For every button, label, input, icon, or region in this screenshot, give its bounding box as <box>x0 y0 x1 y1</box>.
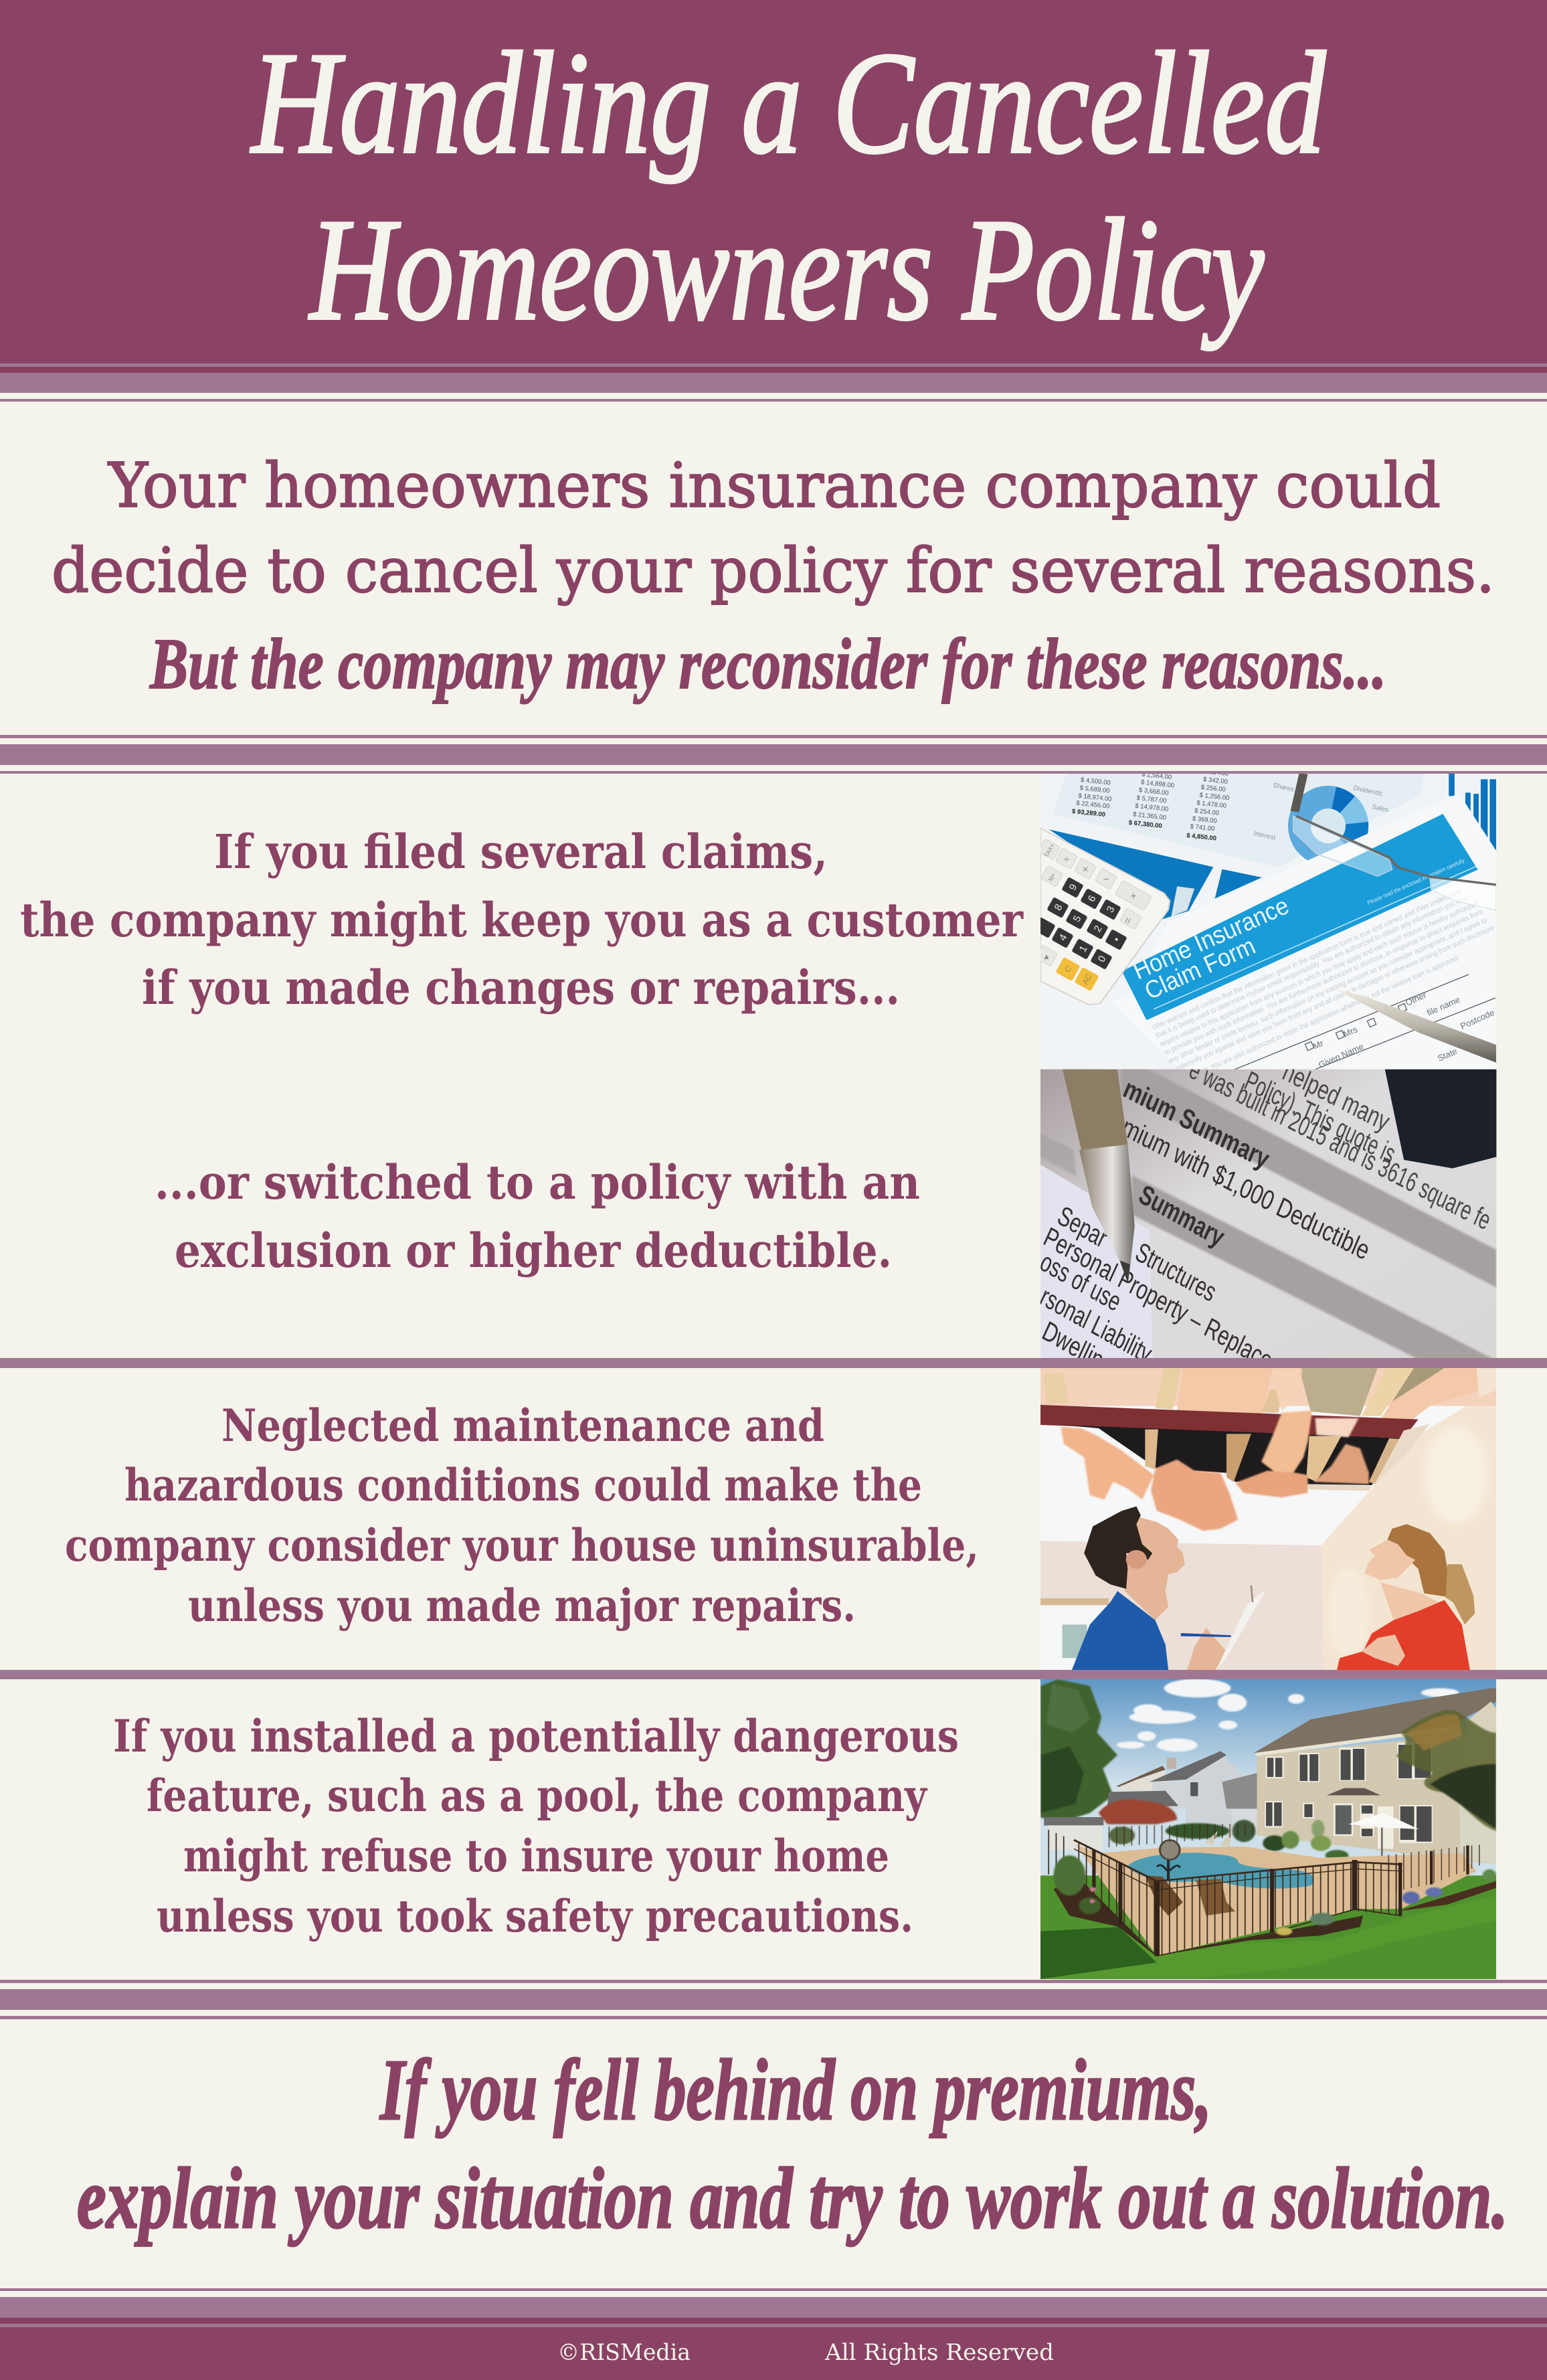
calculator keys: M+ <box>1047 872 1057 883</box>
calculator keys: 9 <box>1067 882 1080 893</box>
text: dangerous feature: unless you took safety precautions. <box>157 1890 913 1942</box>
room walls <box>1040 1388 1496 1670</box>
claim form lettering: Home Insurance <box>1129 891 1293 985</box>
calculator keys: × <box>1082 864 1089 875</box>
calculator keys: + <box>1130 891 1137 902</box>
document small text: $ 67,380.00 <box>1128 819 1162 830</box>
document small text: $ 256.00 <box>1200 784 1226 794</box>
text: several claims: if you made changes or repairs... <box>142 960 900 1015</box>
text: neglected maintenance: company consider your house uninsurable, <box>65 1519 979 1571</box>
calculator keys: AC <box>1080 972 1094 987</box>
pool deck <box>1075 1845 1476 1956</box>
right tree <box>1396 1710 1496 1831</box>
main house <box>1254 1688 1496 1865</box>
footer credits: ©RISMedia <box>557 2339 691 2366</box>
calculator keys: 2 <box>1092 924 1105 934</box>
umbrella <box>1348 1812 1419 1857</box>
table and chart document <box>1052 774 1424 867</box>
document text: Structures <box>1131 1237 1221 1308</box>
photo: policy premium summary <box>1036 1054 1496 1399</box>
calculator keys: 5 <box>1071 914 1084 924</box>
calculator keys: 1 <box>1077 944 1090 954</box>
dark object <box>1385 1070 1496 1169</box>
woman inspecting <box>1337 1524 1475 1670</box>
claim form lettering: file name <box>1425 995 1461 1018</box>
claim form sheet <box>1123 795 1496 1020</box>
red shrub <box>1099 1800 1177 1824</box>
document small text: $ 4,850.00 <box>1186 832 1216 843</box>
document text: rsonal Liability <box>1036 1281 1157 1369</box>
divider band <box>0 1980 1547 2019</box>
claim form lettering: Claim Form <box>1141 932 1259 1005</box>
title: Homeowners Policy <box>308 189 1264 351</box>
neighbouring houses <box>1044 1751 1257 1850</box>
text: higher deductible: ...or switched to a policy with an <box>155 1155 920 1210</box>
document small text: Shares <box>1272 782 1295 794</box>
document text: Separ <box>1053 1200 1112 1254</box>
document small text: Dividends <box>1352 784 1383 798</box>
calculator keys: • <box>1111 935 1123 944</box>
calculator keys: ÷ <box>1064 854 1070 865</box>
claim form lettering: Mr <box>1311 1038 1326 1051</box>
photo: backyard pool with fence <box>1040 1679 1496 1979</box>
title: Handling a Cancelled <box>250 23 1326 184</box>
claim form lettering: State <box>1436 1046 1459 1064</box>
closing message <box>77 2042 1508 2247</box>
calculator keys: − <box>1103 874 1109 885</box>
pie chart <box>1288 786 1368 866</box>
left tree <box>1040 1679 1117 1822</box>
calculator keys: = <box>1121 916 1135 926</box>
claim form lettering: that it is being used to determine my/our credit responsibility. You are authorized to obtain any information you may <box>1154 894 1470 1040</box>
document text: oss of use <box>1036 1246 1125 1317</box>
text: dangerous feature: If you installed a potentially dangerous <box>113 1710 959 1762</box>
closing message: If you fell behind on premiums, <box>379 2042 1212 2138</box>
document small text: $ 5,787.00 <box>1136 794 1167 805</box>
footer banner <box>0 2288 1547 2380</box>
pen <box>1337 990 1496 1063</box>
text: higher deductible: exclusion or higher deductible. <box>175 1223 892 1278</box>
glasses <box>1293 774 1496 910</box>
intro text: decide to cancel your policy for several reasons. <box>52 535 1495 606</box>
divider bar <box>0 1670 1547 1679</box>
claim form lettering: Postcode <box>1459 1007 1496 1031</box>
document small text: $ 1,478.00 <box>1196 799 1227 810</box>
flowers and shrubs <box>1054 1855 1496 1936</box>
footer credits: All Rights Reserved <box>824 2339 1054 2366</box>
claim form lettering: Other <box>1404 990 1429 1008</box>
document small text: $ 93,289.00 <box>1072 808 1105 819</box>
claim form lettering: require relative to this application from any sources to which you may apply and each such source is hereby authorized <box>1158 900 1479 1049</box>
lawn and mulch <box>1040 1875 1496 1979</box>
calculator keys: TAX+ <box>1043 842 1056 859</box>
document small text: $ 5,689.00 <box>1079 784 1110 795</box>
text: dangerous feature <box>113 1710 959 1942</box>
document text: mium Summary <box>1119 1073 1274 1175</box>
document text: Summary <box>1135 1179 1229 1253</box>
document small text: $ 254.00 <box>1194 807 1219 817</box>
document small text: $ 18,974.00 <box>1078 792 1112 803</box>
intro text: Your homeowners insurance company could <box>107 450 1441 521</box>
calculator keys: 3 <box>1105 904 1117 915</box>
top-right bar chart <box>1449 774 1496 851</box>
claim form lettering: indemnify you against and save you harm from any and all claims in damages or otherwise arising from such disclosure <box>1174 924 1495 1073</box>
document text: helped many <box>1279 1055 1394 1138</box>
calculator keys: C <box>1063 964 1074 974</box>
document small text <box>1072 774 1388 841</box>
claim form lettering: Given Name <box>1317 1041 1365 1070</box>
claim form lettering: Mrs <box>1342 1024 1359 1039</box>
text: several claims: If you filed several claims, <box>214 824 828 879</box>
pen <box>1063 1070 1135 1283</box>
document small text: Interest <box>1253 830 1276 842</box>
man inspecting <box>1072 1507 1266 1670</box>
calculator keys: 0 <box>1096 954 1109 964</box>
document small text: $ 2,564.00 <box>1142 771 1172 781</box>
title <box>250 23 1326 351</box>
clouds <box>1117 1679 1459 1752</box>
document text: Policy). This quote is <box>1241 1066 1400 1170</box>
photo: home insurance claim form <box>1040 774 1496 1070</box>
intro text <box>52 450 1495 606</box>
claim form lettering: to provide you with such information. You are furthermore authorized to disclose, in response to direct enquiries from <box>1163 908 1484 1057</box>
window <box>1040 1598 1109 1670</box>
calculator keys <box>1033 839 1152 991</box>
document text: Personal Property – Replace <box>1039 1221 1277 1376</box>
document text: Dwelling <box>1038 1315 1118 1381</box>
divider band <box>0 735 1547 774</box>
ceiling insulation and joists <box>1040 1368 1496 1491</box>
text: neglected maintenance <box>65 1399 979 1632</box>
text: dangerous feature: feature, such as a pool, the company <box>147 1770 927 1822</box>
iron fence <box>1046 1823 1482 1956</box>
document small text: $ 14,898.00 <box>1141 778 1175 790</box>
calculator keys: 8 <box>1053 902 1065 913</box>
patio plants <box>1109 1820 1348 1861</box>
lounge chairs <box>1145 1831 1235 1916</box>
text: neglected maintenance: hazardous conditions could make the <box>124 1459 922 1511</box>
calculator keys: 6 <box>1086 894 1099 904</box>
document small text: $ 1,256.00 <box>1199 792 1230 802</box>
text: higher deductible <box>155 1155 920 1278</box>
document small text: $ 14,978.00 <box>1135 802 1169 813</box>
footer credits <box>557 2339 1054 2366</box>
divider bar <box>0 1358 1547 1368</box>
claim form lettering: any other lender or credit bureau, such information on my loaning account as you consider appropriate, and I agree to <box>1167 916 1488 1066</box>
calculator keys: ▲ <box>1042 952 1051 961</box>
text: several claims <box>20 824 1024 1015</box>
document small text: $ 3,668.00 <box>1138 786 1169 797</box>
document small text: Sales <box>1371 803 1389 814</box>
document small text: $ 741.00 <box>1190 823 1215 833</box>
calculator <box>1040 829 1170 1005</box>
document small text: $ 4,500.00 <box>1080 776 1111 787</box>
document small text: $ 22,456.00 <box>1076 800 1110 811</box>
document small text: $ 342.00 <box>1203 776 1228 786</box>
blue report charts <box>1049 829 1262 921</box>
text: dangerous feature: might refuse to insure your home <box>183 1830 889 1882</box>
claim form lettering: I/We warrant and confirm that the information given in the application form is true and correct and I/We understand <box>1151 887 1463 1032</box>
document text <box>1040 1070 1489 1358</box>
hanging insulation <box>1061 1368 1369 1531</box>
document small text: $ 21,365.00 <box>1133 811 1167 822</box>
document small text: $ 369.00 <box>1192 815 1217 825</box>
text: neglected maintenance: unless you made major repairs. <box>188 1580 856 1632</box>
claim form lettering: or part. You are also authorized to retain the application whether or not the relative loan is approved. <box>1188 954 1461 1081</box>
photo: damaged ceiling inspection <box>1040 1368 1496 1670</box>
pool <box>1127 1853 1314 1889</box>
grey summary bands <box>1040 1070 1496 1358</box>
document text: mium with $1,000 Deductible <box>1117 1112 1374 1266</box>
calculator keys: 4 <box>1057 932 1070 943</box>
claim form lettering: Please read the enclosed information carefully <box>1366 857 1466 906</box>
claim form lettering <box>1129 857 1496 1081</box>
header banner <box>0 0 1547 402</box>
text: several claims: the company might keep you as a customer <box>20 892 1024 948</box>
document small text: $ 154.00 <box>1204 768 1229 778</box>
clock post <box>1157 1840 1180 1880</box>
text: neglected maintenance: Neglected maintenance and <box>221 1399 824 1452</box>
